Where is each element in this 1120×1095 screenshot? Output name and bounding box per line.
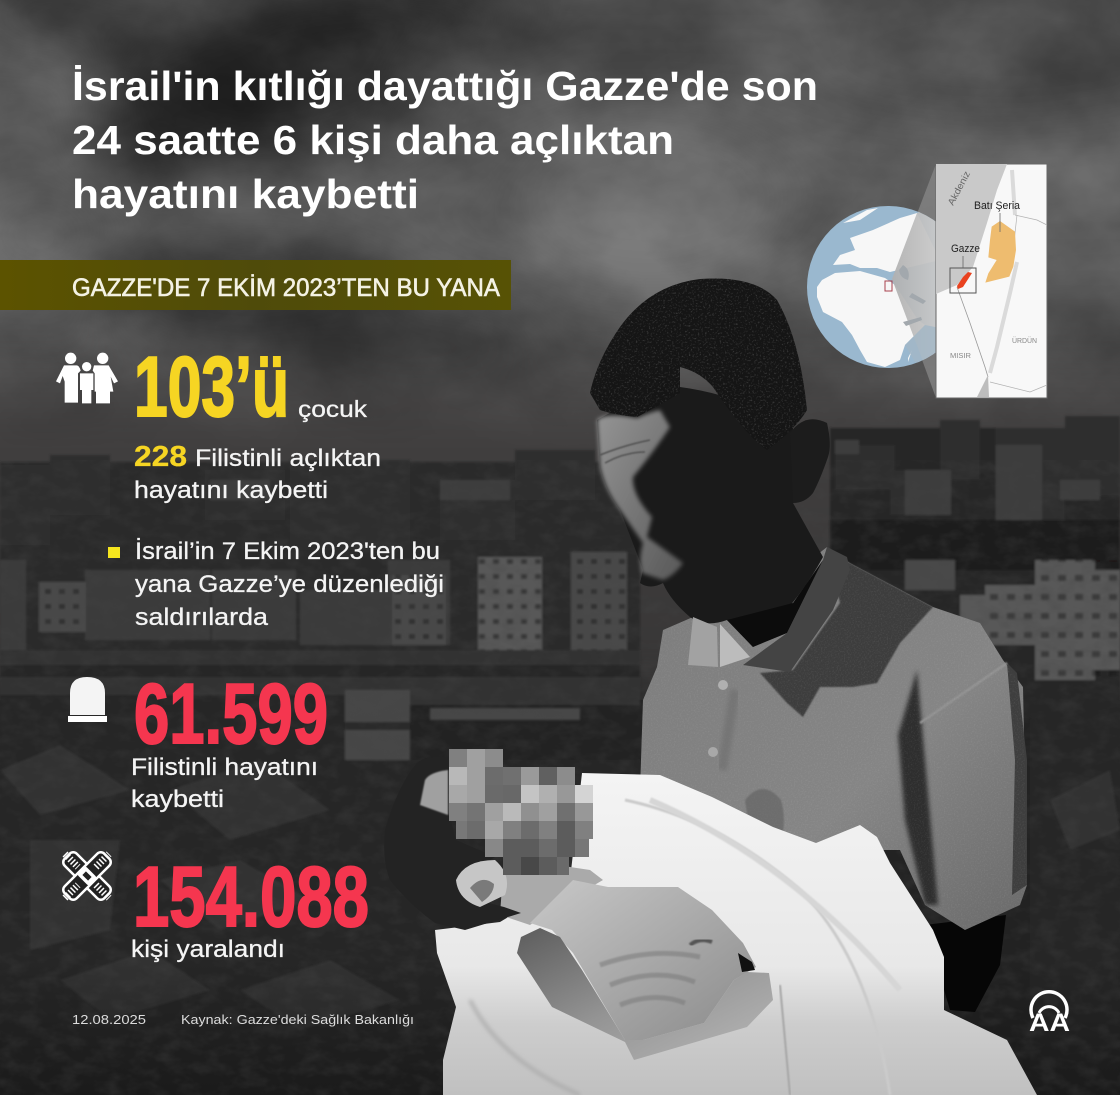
note on attacks [108, 538, 444, 631]
stat: starvation deaths: 228 [134, 441, 187, 473]
title: hayatını kaybetti [72, 171, 419, 217]
stat: wounded: kişi yaralandı [131, 936, 285, 963]
city skyline [0, 416, 1120, 1095]
child's head [384, 757, 521, 930]
gaza strip [957, 272, 972, 289]
shirt shadow [760, 547, 933, 717]
man's shirt [640, 540, 1030, 940]
west bank [985, 221, 1016, 283]
man's forearm [925, 915, 1006, 1012]
stat: starvation deaths: Filistinli açlıktan [195, 445, 381, 472]
icon: crossed bandages [61, 850, 113, 902]
man's ear [790, 419, 830, 503]
stat: killed: kaybetti [131, 786, 224, 813]
subtitle band: GAZZE'DE 7 EKİM 2023’TEN BU YANA [72, 273, 500, 302]
stat: killed: Filistinli hayatını [131, 754, 318, 781]
note on attacks: yana Gazze’ye düzenlediği [135, 571, 444, 598]
hair [384, 757, 521, 930]
sea [936, 164, 1007, 294]
stat: children: çocuk [298, 396, 368, 422]
child's body [500, 857, 773, 1060]
icon: AA logo [1029, 992, 1070, 1037]
map panel: Batı Şeria [974, 200, 1021, 212]
target rectangle [885, 281, 892, 291]
note on attacks: saldırılarda [135, 604, 269, 631]
map panel: Akdeniz [946, 169, 973, 207]
sky and smoke clouds [0, 0, 1120, 700]
map panel: Gazze [951, 243, 980, 255]
zoom wedge outside globe [892, 164, 936, 398]
note on attacks: İsrail’in 7 Ekim 2023'ten bu [135, 538, 440, 565]
icon: AA logo: AA [1029, 1009, 1070, 1037]
globe [807, 206, 936, 368]
stat: killed [131, 667, 328, 813]
title: 24 saatte 6 kişi daha açlıktan [72, 117, 674, 163]
title: İsrail'in kıtlığı dayattığı Gazze'de son [72, 63, 818, 109]
photo: man holding child [384, 275, 1037, 1095]
lit forehead and nose [597, 410, 683, 580]
stat: wounded [131, 850, 369, 963]
pixelated face mosaic [449, 749, 593, 875]
child's arm [517, 928, 773, 1060]
icon: family [56, 353, 118, 403]
footer: date and source: 12.08.2025 [72, 1012, 146, 1027]
stat: wounded: 154.088 [133, 850, 369, 945]
man's neck and face [597, 387, 823, 647]
sheet [435, 773, 1037, 1095]
footer: date and source: Kaynak: Gazze'deki Sağlık Bakanlığı [181, 1012, 414, 1027]
map panel: MISIR [950, 353, 971, 360]
map panel: ÜRDÜN [1012, 337, 1037, 345]
subtitle band [0, 260, 511, 310]
ear [456, 860, 507, 907]
footer: date and source [72, 1012, 414, 1027]
map panel [936, 164, 1047, 398]
stat: starvation deaths: hayatını kaybetti [134, 477, 328, 504]
man's hair [585, 275, 810, 455]
icon: tombstone [68, 677, 107, 722]
stat: starvation deaths [134, 441, 381, 504]
collar [743, 547, 850, 672]
locator map [807, 164, 1047, 398]
title [72, 63, 818, 217]
stat: killed: 61.599 [134, 667, 328, 762]
stat: children: 103’ü [134, 340, 289, 435]
